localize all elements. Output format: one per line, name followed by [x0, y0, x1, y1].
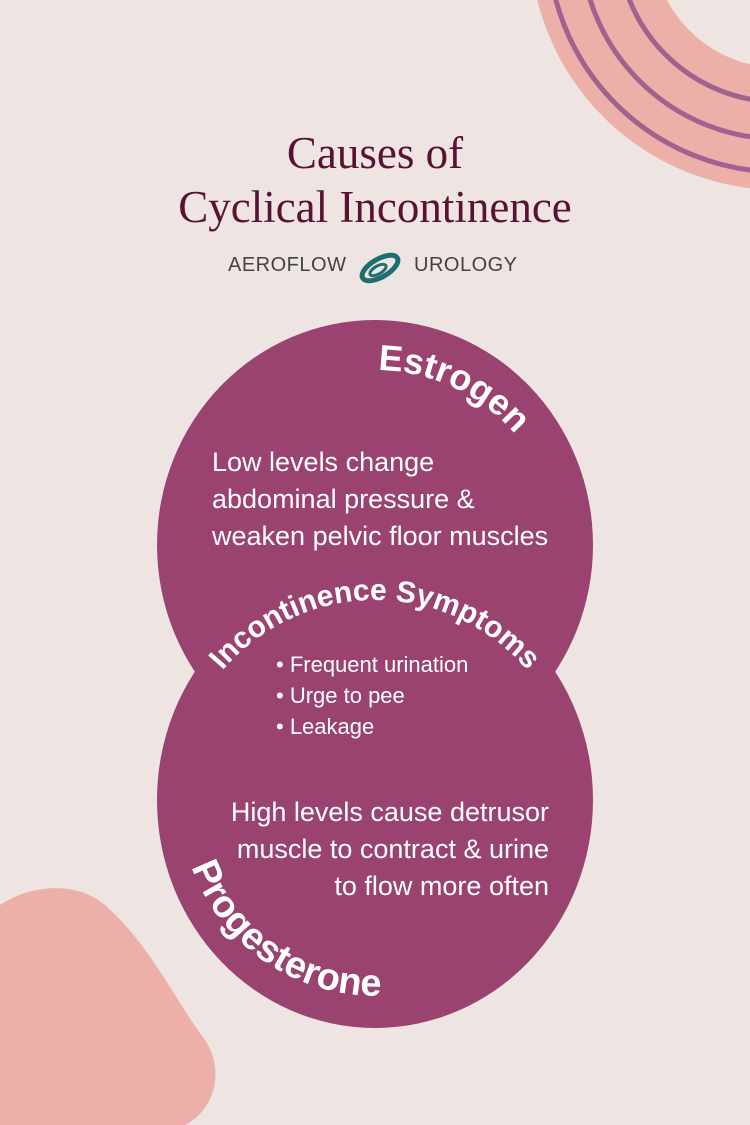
text: progesterone: muscle to contract & urine	[237, 834, 549, 864]
logo: AEROFLOW	[228, 254, 346, 276]
text: progesterone: to flow more often	[334, 871, 549, 901]
text: estrogen: abdominal pressure &	[212, 484, 475, 514]
title: Cyclical Incontinence	[178, 182, 572, 232]
text: progesterone: High levels cause detrusor	[231, 797, 549, 827]
symptom list	[276, 652, 468, 739]
text: progesterone	[231, 797, 549, 901]
symptom list: • Urge to pee	[276, 683, 405, 708]
text: estrogen	[212, 447, 548, 551]
text: estrogen: weaken pelvic floor muscles	[212, 521, 548, 551]
title	[178, 128, 572, 232]
logo	[228, 252, 518, 284]
heading: Progesterone: Progesterone	[192, 858, 380, 996]
heading: Incontinence Symptoms: Incontinence Symptoms	[208, 581, 536, 670]
symptom list: • Frequent urination	[276, 652, 468, 677]
symptom list: • Leakage	[276, 714, 374, 739]
title: Causes of	[287, 128, 463, 178]
logo: UROLOGY	[414, 254, 518, 276]
text: estrogen: Low levels change	[212, 447, 434, 477]
heading: Estrogen: Estrogen	[380, 345, 526, 432]
icon: logo swirl	[360, 252, 400, 284]
